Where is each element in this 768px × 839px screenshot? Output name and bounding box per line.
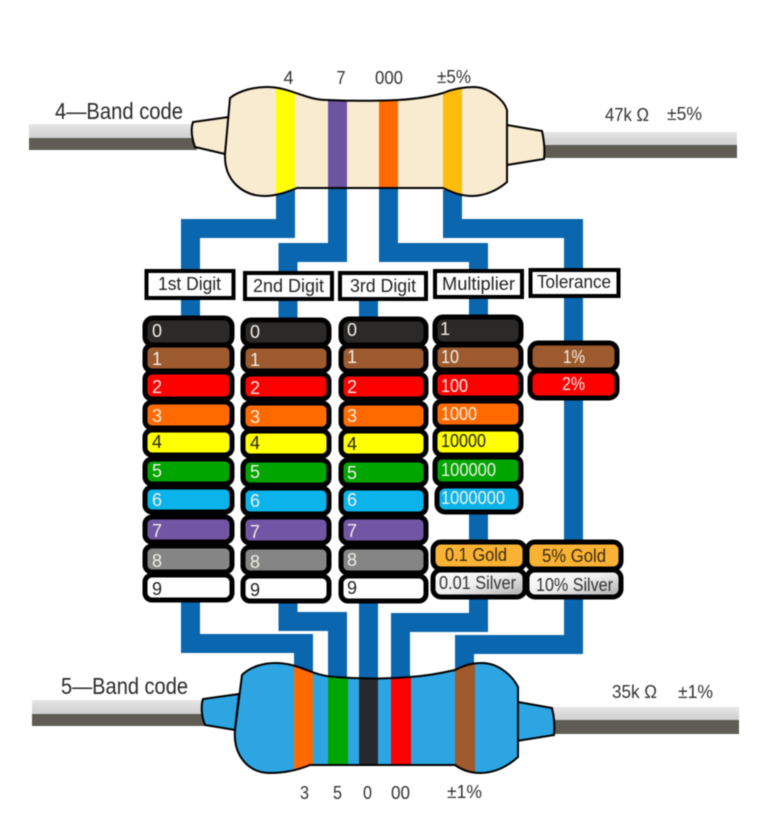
- 4-band value labels: ±5%: [437, 67, 471, 87]
- body: [235, 663, 518, 773]
- lead: right: [550, 707, 739, 734]
- 5-band value labels: ±1%: [447, 782, 482, 802]
- header: Tolerance: [530, 270, 618, 296]
- channel: multiplier: [388, 185, 478, 682]
- column: 3rd digit: 4: [347, 434, 357, 454]
- resistor: 5-band: [32, 655, 739, 780]
- channel: 2nd digit top: [288, 185, 338, 320]
- column: multiplier: [435, 317, 521, 512]
- 5-band result: [612, 682, 713, 702]
- column: 1st digit: 1: [152, 349, 162, 369]
- 4-band result: 47k Ω: [605, 105, 649, 125]
- connector channels: [190, 185, 574, 682]
- header: 2nd Digit: 2nd Digit: [253, 276, 324, 296]
- column: 2nd digit: 8: [250, 552, 260, 572]
- column: 2nd digit: 9: [250, 580, 260, 600]
- column: multiplier: 1000000: [441, 488, 505, 508]
- 5-band result: 35k Ω: [612, 682, 657, 702]
- column: 2nd digit: 4: [250, 433, 260, 453]
- column: tolerance: [530, 343, 617, 398]
- column: 3rd digit: [341, 319, 426, 601]
- header: Tolerance: Tolerance: [537, 272, 611, 292]
- bands: [293, 664, 476, 772]
- bands: [275, 88, 463, 194]
- body: [225, 87, 507, 196]
- column: 1st digit: 3: [152, 406, 162, 426]
- header: 3rd Digit: 3rd Digit: [350, 276, 416, 296]
- column: 1st digit: 9: [152, 579, 162, 599]
- column: multiplier: 10: [441, 347, 459, 367]
- column: 2nd digit: 5: [250, 462, 260, 482]
- tolerance: gold and silver: 5% Gold: [542, 546, 606, 566]
- column: 1st digit: 2: [152, 377, 162, 397]
- header: 2nd Digit: [245, 273, 332, 299]
- column: 3rd digit: 1: [347, 347, 357, 367]
- column: 1st digit: 0: [152, 321, 162, 341]
- column: 3rd digit: 0: [347, 320, 357, 340]
- column: 1st digit: [145, 318, 232, 600]
- column: 2nd digit: [243, 320, 329, 601]
- 4-band value labels: 4: [284, 68, 294, 88]
- channel: tolerance: [452, 190, 574, 672]
- 4-band result: ±5%: [667, 104, 702, 124]
- column: 3rd digit: 6: [347, 490, 357, 510]
- column: 1st digit: 5: [152, 461, 162, 481]
- multiplier: gold and silver: [433, 542, 525, 597]
- column: 1st digit: 6: [152, 490, 162, 510]
- tolerance: gold and silver: [527, 542, 621, 597]
- channel: 1st digit bottom: [190, 598, 304, 675]
- body cap: left: [202, 694, 239, 730]
- heading: 5-band code: 5—Band code: [61, 673, 188, 699]
- column: tolerance: 2%: [562, 374, 585, 394]
- 5-band value labels: [300, 782, 482, 803]
- 5-band result: ±1%: [678, 682, 713, 702]
- header: Multiplier: [435, 271, 522, 297]
- header: 1st Digit: 1st Digit: [158, 274, 221, 294]
- column: tolerance: 1%: [563, 347, 585, 367]
- column: 3rd digit: 5: [347, 463, 357, 483]
- column: 3rd digit: 3: [347, 406, 357, 426]
- 4-band value labels: 7: [336, 68, 346, 88]
- channel: 2nd digit bottom: [288, 598, 338, 680]
- body cap: right: [517, 702, 554, 741]
- lead: left: [29, 124, 197, 150]
- column: multiplier: 1000: [441, 404, 477, 424]
- column: 2nd digit: 2: [250, 378, 260, 398]
- column: 3rd digit: 8: [347, 550, 357, 570]
- column: 2nd digit: 6: [250, 491, 260, 511]
- 4-band value labels: [284, 67, 471, 88]
- 5-band value labels: 0: [363, 783, 372, 803]
- channel: 3rd digit: [359, 290, 378, 682]
- column: 1st digit: 8: [152, 551, 162, 571]
- column: 3rd digit: 7: [347, 521, 357, 541]
- header: 1st Digit: [146, 271, 234, 298]
- body outline: [235, 663, 518, 773]
- body cap: left: [192, 117, 229, 154]
- body cap: right: [507, 125, 544, 165]
- lead: left: [32, 700, 208, 726]
- channel: 1st digit top: [190, 190, 286, 320]
- header: 3rd Digit: [340, 273, 426, 299]
- column: 1st digit: 4: [152, 432, 162, 452]
- body outline: [225, 87, 507, 196]
- multiplier: gold and silver: 0.01 Silver: [439, 573, 516, 593]
- column: multiplier: 100: [441, 376, 468, 396]
- column: 1st digit: 7: [152, 521, 162, 541]
- tolerance: gold and silver: 10% Silver: [536, 575, 613, 595]
- header: Multiplier: Multiplier: [442, 274, 515, 294]
- column: 2nd digit: 1: [250, 350, 260, 370]
- column: multiplier: 10000: [441, 431, 486, 451]
- column: 2nd digit: 3: [250, 407, 260, 427]
- multiplier: gold and silver: 0.1 Gold: [445, 545, 507, 565]
- 5-band value labels: 00: [391, 783, 410, 803]
- column: 2nd digit: 7: [250, 522, 260, 542]
- lead: right: [540, 132, 737, 158]
- 4-band result: [605, 104, 702, 125]
- column: 3rd digit: 2: [347, 377, 357, 397]
- column: 3rd digit: 9: [347, 578, 357, 598]
- 4-band value labels: 000: [375, 68, 403, 88]
- 5-band value labels: 3: [300, 783, 309, 803]
- column: multiplier: 1: [440, 319, 450, 339]
- resistor: 4-band: [29, 80, 737, 200]
- column: 2nd digit: 0: [250, 322, 260, 342]
- heading: 4-band code: 4—Band code: [55, 98, 183, 124]
- column: multiplier: 100000: [441, 460, 496, 480]
- 5-band value labels: 5: [333, 783, 342, 803]
